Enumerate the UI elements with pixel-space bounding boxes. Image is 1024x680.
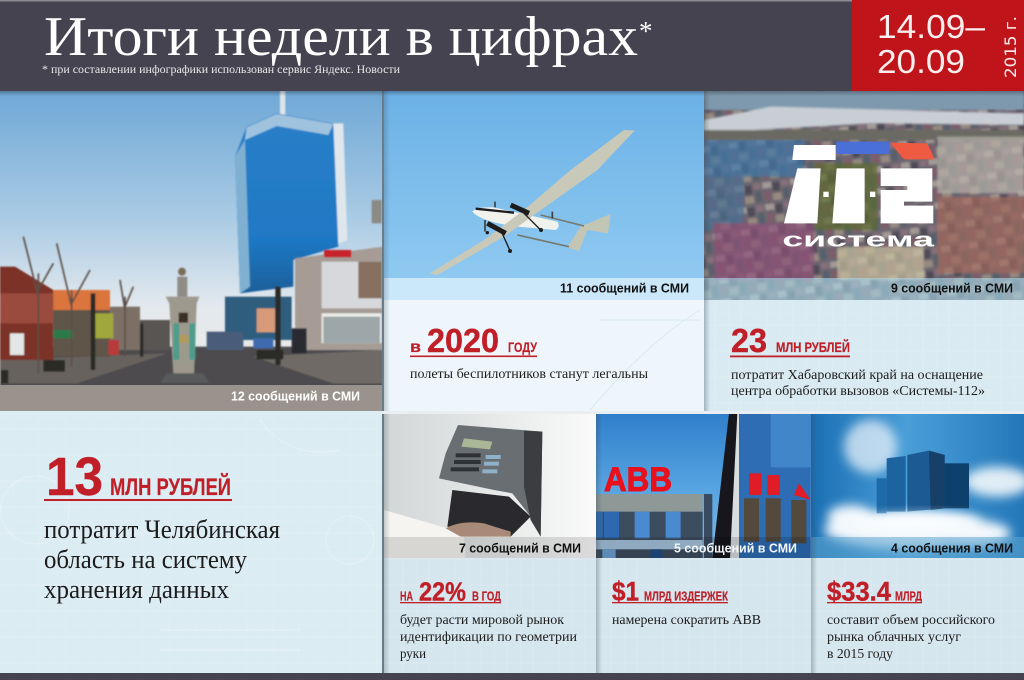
icon: Система-112 logo: [782, 142, 936, 252]
caption band: 5 mentions: [596, 537, 811, 558]
panel: Chelyabinsk text: [0, 411, 382, 673]
stat: 13 million: [44, 447, 232, 507]
caption band: 11 mentions: 11 сообщений в СМИ: [560, 282, 689, 296]
stat: 22 percent: [400, 576, 501, 606]
header: [0, 0, 852, 91]
panel: drone photo: [384, 91, 704, 300]
body: hand scanner: будет расти мировой рынок: [400, 613, 564, 628]
panel: hand scanner photo: [384, 414, 596, 558]
caption band: 9 mentions: 9 сообщений в СМИ: [891, 282, 1013, 296]
stat: 2020: 2020: [427, 322, 499, 359]
caption band: 4 mentions: [811, 537, 1024, 558]
stat: 2020: [410, 322, 537, 359]
body: hand scanner: [400, 613, 578, 662]
stat: 13 million: МЛН РУБЛЕЙ: [110, 473, 231, 501]
stat: 33.4 billion: МЛРД: [895, 590, 922, 604]
icon: drone: [430, 130, 635, 275]
stat: 1 billion: $1: [612, 576, 639, 606]
body: Chelyabinsk: [44, 515, 280, 604]
panel: cloud text: [811, 558, 1024, 673]
body: hand scanner: идентификации по геометрии: [400, 630, 578, 645]
stat: 23 million: МЛН РУБЛЕЙ: [776, 338, 850, 355]
panel: 112 text: [704, 300, 1024, 411]
body: Chelyabinsk: область на систему: [44, 545, 247, 574]
caption band: 12 mentions: [0, 385, 382, 411]
year: 2015 г.: [1001, 16, 1020, 78]
date range: 20.09: [877, 43, 965, 80]
caption band: 7 mentions: 7 сообщений в СМИ: [459, 542, 581, 556]
stat: 33.4 billion: $33.4: [827, 576, 891, 606]
body: hand scanner: руки: [400, 647, 426, 662]
body: 112: центра обработки вызовов «Системы-112»: [731, 384, 985, 399]
body: cloud: рынка облачных услуг: [827, 630, 961, 645]
caption band: 7 mentions: [384, 537, 596, 558]
stat: 22 percent: 22%: [419, 576, 466, 606]
caption band: 11 mentions: [384, 278, 704, 300]
body: 112: [731, 368, 985, 399]
stat: 1 billion: [612, 576, 728, 606]
date range: 14.09–: [877, 8, 986, 45]
icon: hand scanner: [384, 425, 542, 558]
date block: [852, 0, 1024, 91]
title: Итоги недели в цифрах: [44, 6, 638, 68]
panel: ABB text: [596, 558, 811, 673]
panel: hand scanner text: [384, 558, 596, 673]
body: ABB: намерена сократить АВВ: [612, 613, 761, 628]
panel: drone text: [384, 300, 704, 411]
caption band: 9 mentions: [704, 278, 1024, 300]
panel: ABB photo: [596, 413, 811, 558]
stat: 2020: ГОДУ: [508, 339, 537, 355]
body: 112: потратит Хабаровский край на оснащение: [731, 368, 983, 383]
body: cloud: [827, 613, 995, 662]
title asterisk: *: [639, 16, 652, 46]
body: cloud: в 2015 году: [827, 647, 893, 662]
stat: 1 billion: МЛРД ИЗДЕРЖЕК: [644, 590, 728, 604]
panel: Chelyabinsk photo: [0, 90, 383, 411]
footnote: * при составлении инфографики использован сервис Яндекс. Новости: [42, 64, 400, 76]
body: Chelyabinsk: потратит Челябинская: [44, 515, 280, 544]
panel: city photo with 112 logo: [700, 87, 1024, 304]
building facade: [704, 413, 811, 558]
stat: 13 million: 13: [46, 447, 103, 507]
icon: Система-112 logo: система: [782, 230, 936, 252]
date range: [877, 8, 986, 80]
caption band: 12 mentions: 12 сообщений в СМИ: [231, 390, 360, 404]
panel: cloud servers photo: [811, 414, 1024, 558]
footer bar: [0, 673, 1024, 680]
body: cloud: составит объем российского: [827, 613, 995, 628]
stat: 2020: в: [410, 339, 421, 356]
body: Chelyabinsk: хранения данных: [44, 575, 229, 604]
stat: 23 million: [730, 322, 850, 359]
body: drone: полеты беспилотников станут легальны: [410, 367, 649, 382]
stat: 22 percent: НА: [400, 590, 413, 604]
caption band: 4 mentions: 4 сообщения в СМИ: [891, 542, 1013, 556]
logo: ABB: ABB: [604, 461, 672, 499]
stat: 23 million: 23: [731, 322, 767, 359]
caption band: 5 mentions: 5 сообщений в СМИ: [674, 542, 797, 556]
stat: 22 percent: В ГОД: [472, 590, 501, 604]
